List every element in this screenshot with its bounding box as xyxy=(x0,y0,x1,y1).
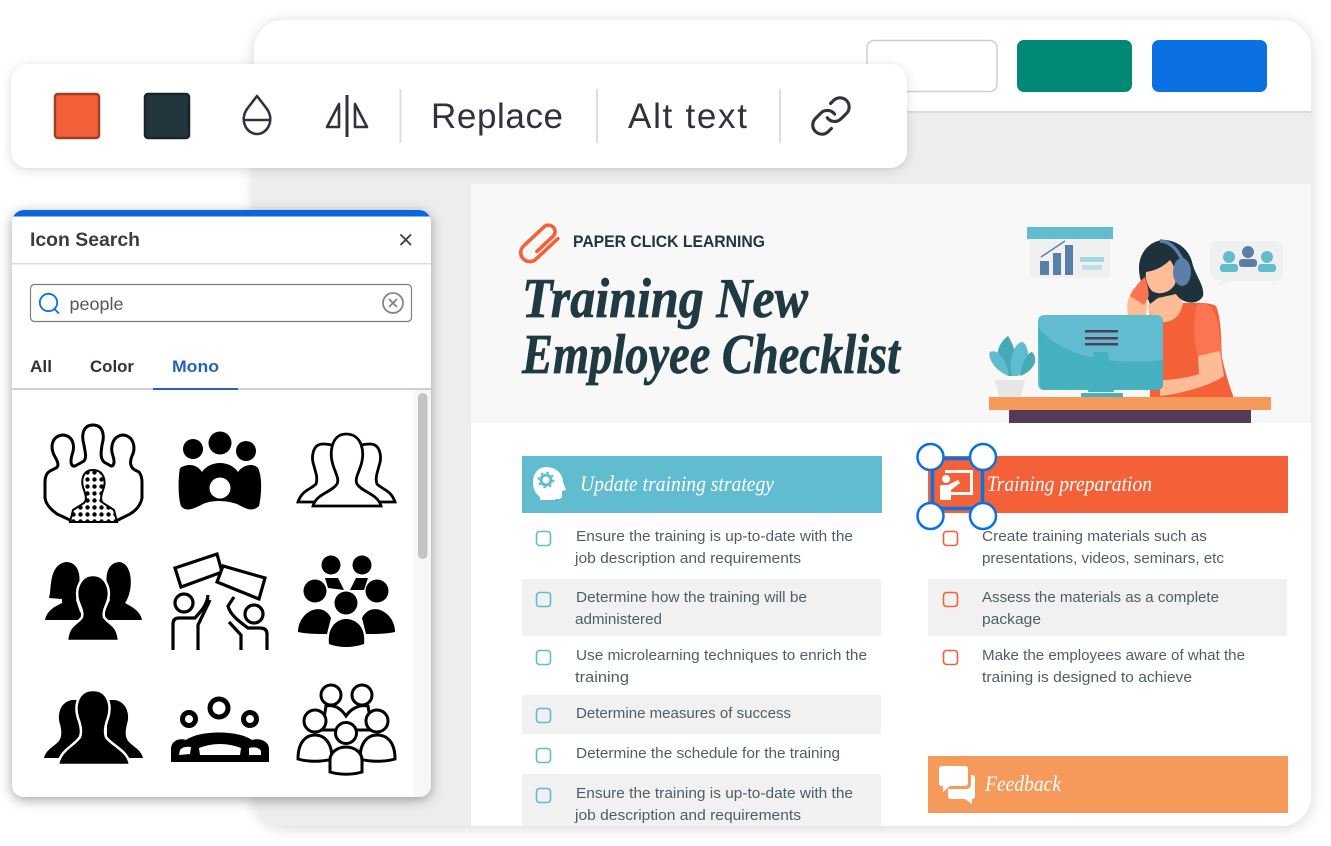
checklist rows: presentations, videos, seminars, etc xyxy=(982,550,1224,567)
selected icon with handles xyxy=(918,444,996,529)
button: green xyxy=(1017,40,1132,92)
people icon 4 xyxy=(45,562,142,641)
section: feedback header: Feedback xyxy=(984,771,1062,796)
title: Training New xyxy=(522,268,809,330)
tabs: Color xyxy=(90,357,134,376)
section header: Training preparation xyxy=(987,471,1152,496)
section header xyxy=(522,456,882,513)
icon: speech bubbles xyxy=(939,766,975,804)
people icon 3 xyxy=(298,434,395,506)
section header xyxy=(928,456,1288,513)
section: training preparation xyxy=(918,444,1288,686)
icon: head with gear xyxy=(533,467,566,500)
checklist rows: training xyxy=(575,669,629,686)
checklist rows: Determine how the training will be xyxy=(576,589,807,606)
brand name: PAPER CLICK LEARNING xyxy=(573,233,765,251)
people icon 9 xyxy=(298,685,395,774)
button: outline xyxy=(867,40,997,92)
checklist rows: Determine the schedule for the training xyxy=(576,745,840,762)
icon search panel xyxy=(12,210,431,797)
button: blue xyxy=(1152,40,1267,92)
monitor xyxy=(1038,315,1163,390)
checklist rows: Ensure the training is up-to-date with the xyxy=(576,785,853,802)
illustration: people bubble xyxy=(1220,246,1276,272)
title: Employee Checklist xyxy=(521,324,901,386)
checklist rows: Make the employees aware of what the xyxy=(982,647,1245,664)
checklist rows: Determine measures of success xyxy=(576,705,791,722)
icon: teacher at board xyxy=(940,470,973,500)
panel title: Icon Search xyxy=(30,230,140,251)
logo: paper clip xyxy=(518,223,560,264)
people icon 1 xyxy=(45,425,142,522)
checklist rows xyxy=(928,528,1287,686)
checklist rows: Ensure the training is up-to-date with the xyxy=(576,528,853,545)
icon: link xyxy=(813,98,849,134)
alt text label: Alt text xyxy=(628,97,747,136)
illustration: chart board xyxy=(1027,227,1113,278)
people icon 8 xyxy=(171,699,269,762)
illustration: potted plant xyxy=(989,336,1035,397)
icon: flip xyxy=(327,95,367,137)
checklist rows: Create training materials such as xyxy=(982,528,1207,545)
document header band xyxy=(518,223,1283,423)
people icon 6 xyxy=(298,556,395,647)
people icon 7 xyxy=(44,690,143,765)
editor window xyxy=(254,20,1311,826)
title xyxy=(521,268,901,386)
tabs: Mono xyxy=(172,357,219,376)
illustration: desk xyxy=(989,397,1271,423)
icon grid xyxy=(44,425,395,774)
replace label: Replace xyxy=(431,97,563,136)
tabs xyxy=(12,357,431,390)
checklist rows: training is designed to achieve xyxy=(982,669,1192,686)
checklist rows: job description and requirements xyxy=(574,807,801,824)
document page xyxy=(471,184,1311,826)
section header: Update training strategy xyxy=(580,471,774,496)
illustration: woman at computer xyxy=(1038,240,1234,398)
tabs: All xyxy=(30,357,52,376)
swatch: orange xyxy=(55,94,99,138)
checklist rows xyxy=(522,528,881,826)
people icon 2 xyxy=(179,432,261,510)
icon: opacity drop xyxy=(243,96,271,134)
people icon 5 xyxy=(173,554,267,650)
icon: close xyxy=(400,234,411,245)
section: feedback header xyxy=(928,756,1288,813)
checklist rows: Use microlearning techniques to enrich the xyxy=(576,647,867,664)
checklist rows: job description and requirements xyxy=(574,550,801,567)
search field xyxy=(30,284,412,322)
checklist rows: administered xyxy=(575,611,662,628)
checklist rows: Assess the materials as a complete xyxy=(982,589,1219,606)
checklist rows: package xyxy=(982,611,1041,628)
search field: people xyxy=(70,294,124,314)
section: update training strategy xyxy=(522,456,882,826)
toolbar xyxy=(11,64,907,168)
swatch: dark xyxy=(145,94,189,138)
